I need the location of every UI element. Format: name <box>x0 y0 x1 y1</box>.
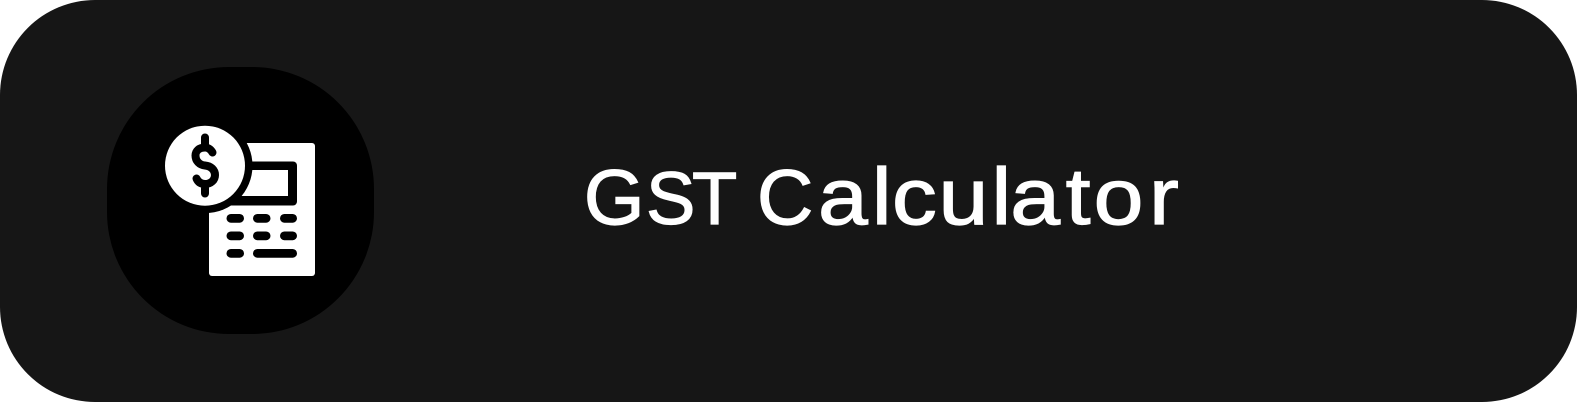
calculator body <box>209 143 315 276</box>
dollar sign <box>196 138 215 194</box>
title: C <box>757 153 813 241</box>
calculator buttons <box>226 214 297 258</box>
title <box>584 151 1179 241</box>
icon: calculator with dollar coin <box>158 118 315 276</box>
title: ST <box>646 157 737 240</box>
coin halo <box>158 118 252 213</box>
icon tile: black rounded square <box>107 67 374 334</box>
calculator screen <box>225 162 297 206</box>
title: G <box>584 153 645 241</box>
coin <box>165 126 245 206</box>
title: alculator <box>818 151 1179 241</box>
